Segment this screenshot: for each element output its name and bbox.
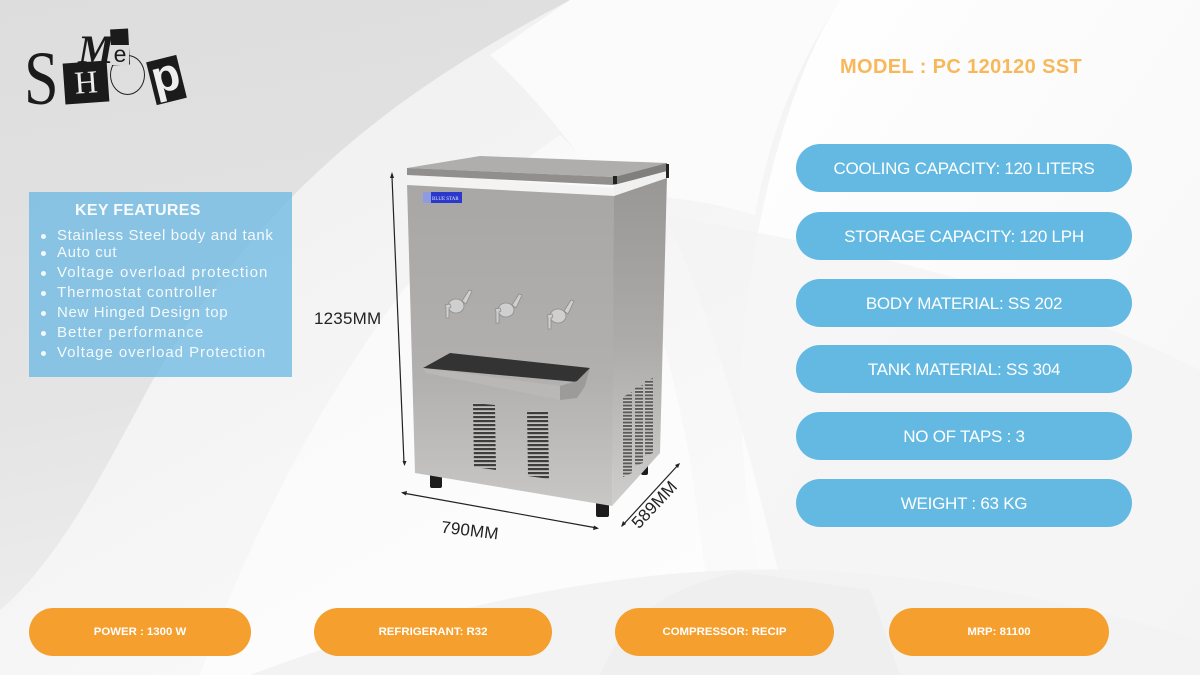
drip tray: [423, 353, 590, 382]
logo letter O: [110, 55, 145, 95]
feature list: Thermostat controller: [57, 284, 218, 301]
product image: water cooler: BLUE STAR: [432, 197, 459, 202]
taps: [445, 290, 574, 329]
feature list: [41, 227, 273, 361]
logo letter H block: H: [73, 63, 99, 101]
spec pill: number of taps: NO OF TAPS : 3: [903, 427, 1025, 446]
feature list: Auto cut: [57, 244, 117, 261]
spec pill: body material: [796, 279, 1132, 327]
label: width 790MM: 790MM: [440, 518, 500, 543]
front vents: [473, 403, 496, 470]
bottom pill: refrigerant: REFRIGERANT: R32: [379, 626, 487, 638]
spec pill: weight: [796, 479, 1132, 527]
logo letter e block: [110, 29, 130, 65]
feature list: Better performance: [57, 324, 204, 341]
bottom pill: compressor: [615, 608, 834, 656]
front face: [407, 183, 615, 506]
logo: Me Shop ransom-note lettering: [24, 27, 187, 121]
spec pill: cooling capacity: COOLING CAPACITY: 120 LITERS: [834, 159, 1094, 178]
spec pill: tank material: [796, 345, 1132, 393]
spec pill: storage capacity: STORAGE CAPACITY: 120 LPH: [844, 227, 1084, 246]
feature list: Voltage overload protection: [57, 264, 268, 281]
lid: [407, 156, 667, 177]
logo letter p block: p: [145, 47, 185, 104]
bottom pill: MRP: MRP: 81100: [967, 626, 1031, 638]
arrow: depth dimension: [621, 463, 680, 527]
side vents: [623, 392, 632, 477]
feature list: Stainless Steel body and tank: [57, 227, 273, 244]
logo letter H block: [63, 61, 109, 104]
feature list: New Hinged Design top: [57, 304, 228, 321]
bottom pill: refrigerant: [314, 608, 552, 656]
title: model number: MODEL : PC 120120 SST: [840, 56, 1082, 78]
label: depth 589MM: 589MM: [628, 477, 681, 532]
logo letter M: M: [78, 27, 114, 72]
spec pill: tank material: TANK MATERIAL: SS 304: [868, 360, 1060, 379]
bottom pill: compressor: COMPRESSOR: RECIP: [662, 626, 787, 638]
bottom pill: MRP: [889, 608, 1109, 656]
heading: key features: KEY FEATURES: [75, 202, 201, 219]
feature list: Voltage overload Protection: [57, 344, 266, 361]
logo: Me Shop ransom-note lettering: e: [114, 41, 126, 67]
side face: [612, 176, 667, 506]
label: height 1235MM: 1235MM: [314, 309, 381, 328]
spec pill: body material: BODY MATERIAL: SS 202: [866, 294, 1062, 313]
brand badge: [423, 192, 462, 203]
bottom pill: power: POWER : 1300 W: [94, 626, 186, 638]
spec pill: weight: WEIGHT : 63 KG: [901, 494, 1027, 513]
panel: key features: [29, 192, 292, 377]
arrow: width dimension: [401, 491, 599, 530]
spec pill: cooling capacity: [796, 144, 1132, 192]
spec pill: number of taps: [796, 412, 1132, 460]
bottom pill: power: [29, 608, 251, 656]
logo letter S: S: [24, 37, 59, 121]
white trim: [407, 174, 615, 196]
arrow: height dimension: [390, 172, 406, 466]
spec pill: storage capacity: [796, 212, 1132, 260]
feet: [430, 462, 648, 517]
